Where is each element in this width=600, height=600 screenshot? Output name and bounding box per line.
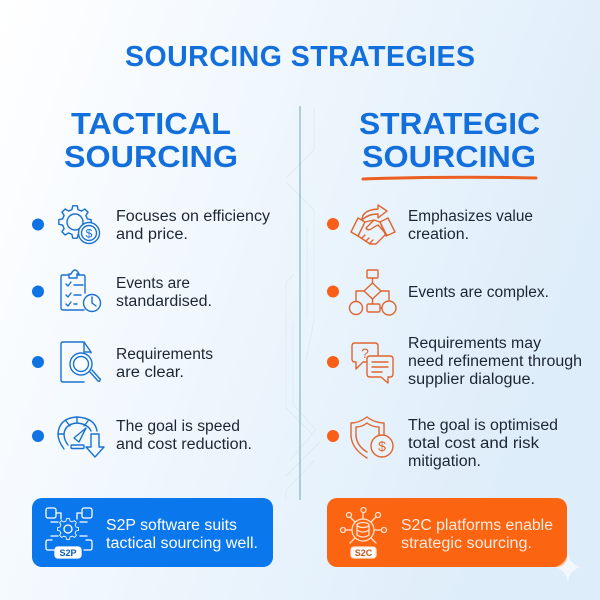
title: SOURCING STRATEGIES xyxy=(125,41,475,73)
text: dialogue: Requirements may xyxy=(408,335,541,352)
heading: strategic sourcing: SOURCING xyxy=(362,139,536,174)
text: S2P: S2P software suits xyxy=(106,517,237,534)
icon: gauge with down arrow xyxy=(58,417,104,457)
icon: sparkle xyxy=(555,552,581,582)
text: S2C: S2C platforms enable xyxy=(401,517,553,534)
text: total cost: mitigation. xyxy=(408,453,481,470)
item: supplier dialogue xyxy=(327,335,582,388)
icon: gear with dollar: $ xyxy=(86,226,93,240)
heading: tactical sourcing xyxy=(64,106,238,174)
item: efficiency and price xyxy=(32,206,270,244)
text: complex: Events are complex. xyxy=(408,284,549,301)
text: total cost: total cost and risk xyxy=(408,435,539,452)
text: value: Emphasizes value xyxy=(408,208,533,225)
text: dialogue: need refinement through xyxy=(408,353,582,370)
icon: S2C database network: S2C xyxy=(355,548,373,558)
text: total cost: The goal is optimised xyxy=(408,417,558,434)
text: S2C xyxy=(401,517,553,552)
icon: gear with dollar xyxy=(59,206,100,244)
icon: handshake with arrow xyxy=(351,205,395,244)
item: speed and cost xyxy=(32,417,252,457)
text: S2P xyxy=(106,517,258,552)
item: value creation xyxy=(327,205,533,244)
text: S2C: strategic sourcing. xyxy=(401,535,532,552)
icon: shield with dollar xyxy=(351,417,393,458)
text: dialogue xyxy=(408,335,582,388)
heading: strategic sourcing xyxy=(359,106,540,174)
icon: document with magnifier xyxy=(61,342,100,382)
icon: S2P network gear xyxy=(46,508,92,558)
text: speed xyxy=(116,418,252,453)
icon: clipboard with clock xyxy=(61,270,100,312)
item: standardised events xyxy=(32,270,212,312)
text: standardised: Events are xyxy=(116,275,190,292)
text: value: creation. xyxy=(408,226,469,243)
item: total cost and risk xyxy=(327,417,558,470)
text: dialogue: supplier dialogue. xyxy=(408,371,535,388)
text: value xyxy=(408,208,533,243)
icon: S2C database network xyxy=(340,508,386,558)
center divider xyxy=(299,106,301,500)
text: clear: are clear. xyxy=(116,364,184,381)
text: efficiency: and price. xyxy=(116,226,188,243)
text: clear xyxy=(116,346,213,381)
panel: strategic sourcing xyxy=(327,106,582,567)
panel: tactical sourcing xyxy=(32,106,273,567)
text: standardised xyxy=(116,275,212,310)
icon: shield with dollar: $ xyxy=(378,438,386,454)
heading: strategic sourcing: STRATEGIC xyxy=(359,106,540,141)
heading: tactical sourcing: TACTICAL xyxy=(71,106,231,141)
text: standardised: standardised. xyxy=(116,293,212,310)
text: speed: and cost reduction. xyxy=(116,436,252,453)
icon: flowchart xyxy=(350,270,396,315)
icon: S2P network gear: S2P xyxy=(59,548,77,558)
text: S2P: tactical sourcing well. xyxy=(106,535,258,552)
text: efficiency: Focuses on efficiency xyxy=(116,208,270,225)
icon: speech bubbles xyxy=(352,343,393,383)
text: total cost xyxy=(408,417,558,470)
heading: tactical sourcing: SOURCING xyxy=(64,139,238,174)
text: clear: Requirements xyxy=(116,346,213,363)
item: clear requirements xyxy=(32,342,213,382)
item: complex events xyxy=(327,270,549,315)
text: speed: The goal is speed xyxy=(116,418,240,435)
callout: S2C platforms xyxy=(327,498,567,567)
text: efficiency xyxy=(116,208,270,243)
underline xyxy=(363,177,536,179)
callout: S2P software xyxy=(32,498,273,567)
icon: speech bubbles: ? xyxy=(361,345,369,361)
